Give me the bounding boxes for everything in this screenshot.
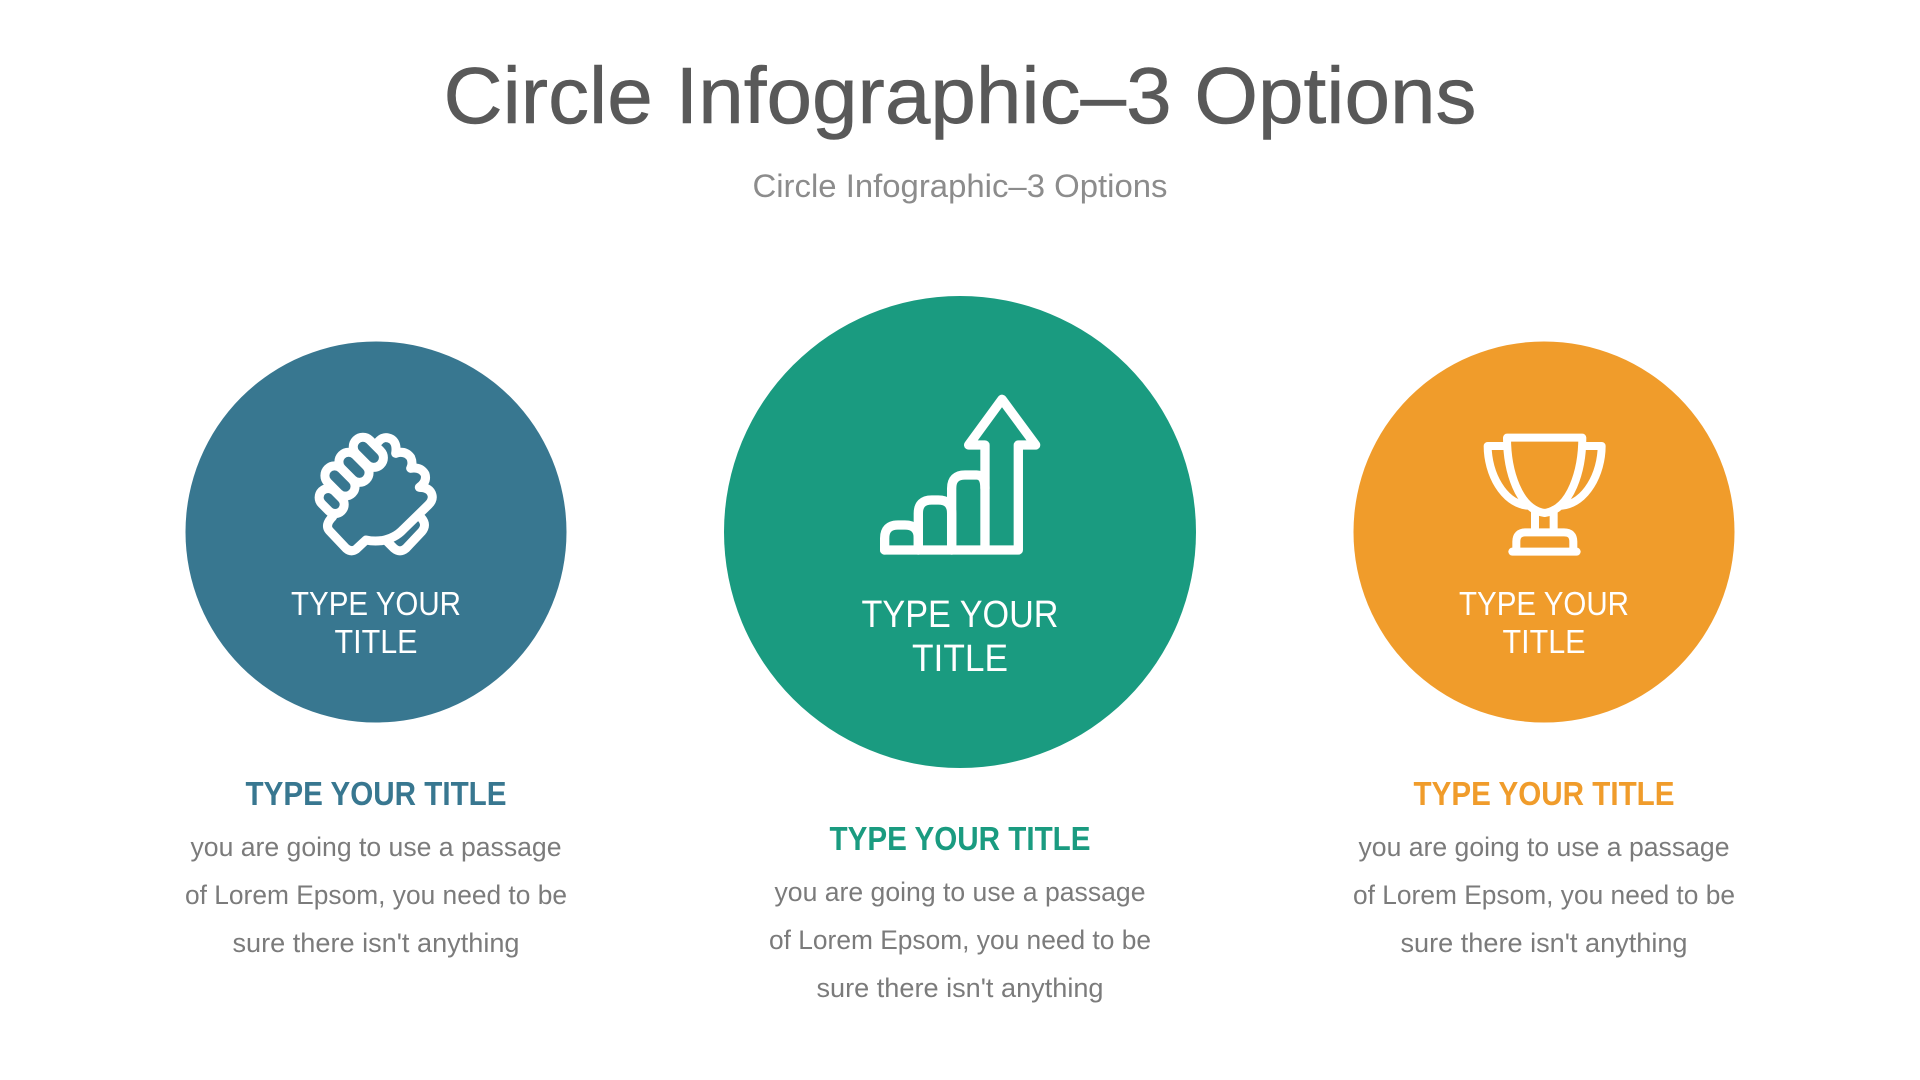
panel: left option xyxy=(185,342,567,958)
icon: growth bars with arrow xyxy=(885,399,1036,550)
text block: you are going to use a passage xyxy=(1358,832,1730,862)
subtitle: Circle Infographic–3 Options xyxy=(752,168,1168,204)
text block xyxy=(769,877,1151,1003)
icon: trophy xyxy=(1488,438,1602,552)
text block: sure there isn't anything xyxy=(232,928,520,958)
circle label xyxy=(1459,585,1629,660)
text block: of Lorem Epsom, you need to be xyxy=(185,880,567,910)
circle label: TYPE YOUR xyxy=(291,585,461,622)
circle label: TITLE xyxy=(1502,623,1586,660)
circle label: TITLE xyxy=(912,638,1008,680)
circle label: TITLE xyxy=(334,623,418,660)
heading: TYPE YOUR TITLE xyxy=(1414,775,1674,812)
heading: TYPE YOUR TITLE xyxy=(246,775,506,812)
text block: of Lorem Epsom, you need to be xyxy=(769,925,1151,955)
circle label xyxy=(291,585,461,660)
text block: of Lorem Epsom, you need to be xyxy=(1353,880,1735,910)
circle label xyxy=(862,594,1058,680)
icon: arm wrestling handshake xyxy=(315,433,432,551)
text block: you are going to use a passage xyxy=(190,832,562,862)
heading: TYPE YOUR TITLE xyxy=(830,820,1090,857)
circle: orange xyxy=(1354,342,1734,722)
text block xyxy=(1353,832,1735,958)
title: Circle Infographic–3 Options xyxy=(444,51,1476,140)
circle: blue xyxy=(186,342,566,722)
text block: you are going to use a passage xyxy=(774,877,1146,907)
text block: sure there isn't anything xyxy=(816,973,1104,1003)
panel: right option xyxy=(1353,342,1735,958)
panel: centre option xyxy=(724,296,1196,1003)
circle: green xyxy=(724,296,1196,768)
text block xyxy=(185,832,567,958)
circle label: TYPE YOUR xyxy=(1459,585,1629,622)
text block: sure there isn't anything xyxy=(1400,928,1688,958)
circle label: TYPE YOUR xyxy=(862,594,1058,636)
